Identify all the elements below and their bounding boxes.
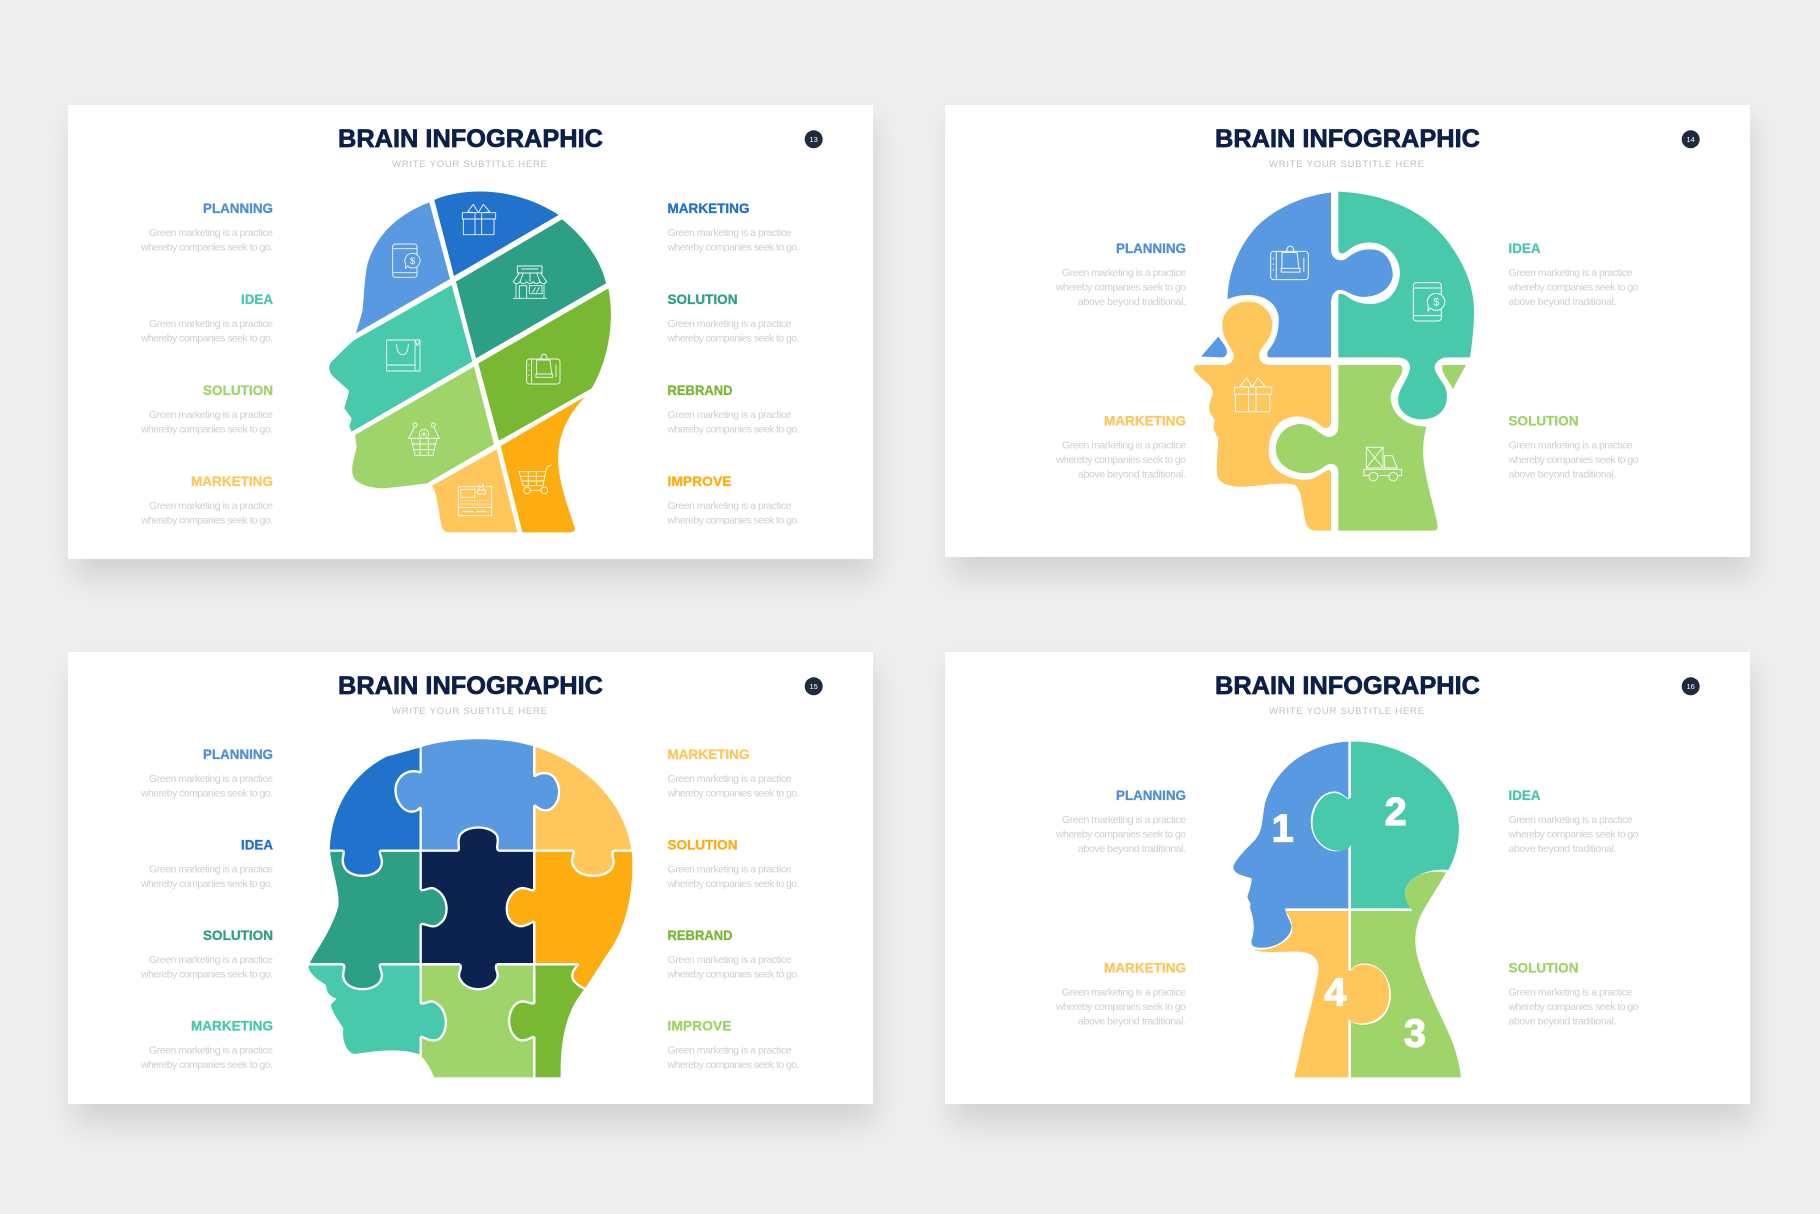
icon: gift <box>462 204 496 235</box>
left text: planning: whereby companies seek to go <box>1055 282 1186 294</box>
left text: marketing: whereby companies seek to go. <box>140 1059 273 1071</box>
right text: idea: whereby companies seek to go <box>1508 829 1639 841</box>
right text: marketing <box>666 200 800 254</box>
left text: marketing: MARKETING <box>191 473 273 489</box>
left text: marketing: whereby companies seek to go. <box>140 514 273 526</box>
left text: planning: Green marketing is a practice <box>1062 267 1186 279</box>
icon: tablet with dollar <box>1413 283 1445 321</box>
subtitle: WRITE YOUR SUBTITLE HERE <box>1269 159 1424 170</box>
segment: light blue crown <box>356 202 450 333</box>
head diagram: eight diagonal segments <box>329 192 611 532</box>
right text: idea: Green marketing is a practice <box>1508 267 1633 279</box>
left text: idea <box>140 836 273 890</box>
number 1: 1 <box>1272 806 1294 850</box>
left text: marketing: MARKETING <box>191 1018 273 1034</box>
left text: marketing: above beyond traditional. <box>1078 1016 1186 1028</box>
left text: planning <box>140 200 273 254</box>
right text: solution: whereby companies seek to go <box>1508 1001 1639 1013</box>
icon: tablet with dollar: $ <box>1433 297 1439 309</box>
cell row 1 <box>330 739 632 850</box>
left text: solution: SOLUTION <box>203 927 273 943</box>
right text: solution: Green marketing is a practice <box>1508 986 1633 998</box>
number 2: 2 <box>1385 790 1407 834</box>
left text: planning: Green marketing is a practice <box>1062 814 1186 826</box>
page badge <box>1682 677 1700 695</box>
head diagram: nine puzzle pieces <box>308 739 632 1078</box>
panel: slide 15 nine-piece puzzle head <box>68 652 873 1104</box>
right text: solution: SOLUTION <box>1508 412 1578 428</box>
icon: cart <box>519 465 552 494</box>
right text: improve: Green marketing is a practice <box>668 1044 792 1056</box>
piece 3: green <box>1351 872 1461 1077</box>
piece: light orange <box>1194 302 1331 531</box>
right text: improve: IMPROVE <box>668 1018 732 1034</box>
right text: marketing: MARKETING <box>668 200 750 216</box>
left text: idea <box>140 291 273 345</box>
right text: idea: above beyond traditional. <box>1508 296 1616 308</box>
right text: improve: whereby companies seek to go. <box>666 1059 800 1071</box>
right text: rebrand: Green marketing is a practice <box>668 954 792 966</box>
right text: idea <box>1508 240 1639 308</box>
panel: slide 14 four-piece puzzle head with icons <box>945 105 1750 557</box>
number 3: 3 <box>1404 1012 1426 1056</box>
right text: solution: Green marketing is a practice <box>1508 439 1633 451</box>
icon: tablet with dollar: $ <box>410 256 416 266</box>
right text: improve <box>666 1018 800 1071</box>
right text: solution: above beyond traditional. <box>1508 1016 1616 1028</box>
segment: light orange neck <box>432 449 517 532</box>
left text: idea: whereby companies seek to go. <box>140 878 273 890</box>
left text: planning <box>1055 240 1186 308</box>
head diagram: four numbered pieces <box>1233 742 1461 1077</box>
subtitle: WRITE YOUR SUBTITLE HERE <box>1269 706 1424 717</box>
left text: marketing: MARKETING <box>1104 412 1186 428</box>
right text: improve: whereby companies seek to go. <box>666 514 800 526</box>
right text: solution: SOLUTION <box>668 836 738 852</box>
left text: planning: PLANNING <box>1116 787 1186 803</box>
right text: solution <box>1508 960 1639 1028</box>
piece: teal <box>1338 192 1474 419</box>
left text: solution: whereby companies seek to go. <box>140 424 273 436</box>
right text: rebrand: REBRAND <box>668 382 732 398</box>
right text: improve: IMPROVE <box>668 473 732 489</box>
page badge: 15 <box>810 682 818 691</box>
page badge <box>1682 130 1700 148</box>
panel: slide 16 numbered puzzle head <box>945 652 1750 1104</box>
segment: orange neck <box>501 397 585 532</box>
left text: marketing: Green marketing is a practice <box>149 500 273 512</box>
icon: tablet with bag <box>1271 246 1308 280</box>
piece: green <box>1276 365 1466 531</box>
piece: blue <box>1201 193 1393 357</box>
right text: improve <box>666 473 800 526</box>
right text: solution: whereby companies seek to go. <box>666 878 800 890</box>
left text: planning: PLANNING <box>1116 240 1186 256</box>
icon: tablet with dollar <box>393 244 420 277</box>
left text: idea: Green marketing is a practice <box>149 318 273 330</box>
left text: planning: whereby companies seek to go. <box>140 242 273 254</box>
icon: tablet with bag <box>527 354 560 384</box>
icon: shop <box>513 266 547 298</box>
left text: marketing <box>1055 412 1186 481</box>
segment: dark teal <box>456 219 606 358</box>
left text: idea: Green marketing is a practice <box>149 864 273 876</box>
left text: planning: above beyond traditional. <box>1078 296 1186 308</box>
right text: marketing <box>666 746 800 800</box>
panel: slide 13 segmented head <box>68 105 873 559</box>
title: BRAIN INFOGRAPHIC <box>1215 125 1480 153</box>
left text: marketing <box>140 473 273 526</box>
page badge <box>805 677 823 695</box>
right text: solution <box>666 836 800 890</box>
subtitle: WRITE YOUR SUBTITLE HERE <box>392 706 547 717</box>
left text: planning: PLANNING <box>203 200 273 216</box>
right text: idea: IDEA <box>1508 787 1540 803</box>
head diagram: four puzzle pieces <box>1194 192 1474 531</box>
right text: rebrand <box>666 927 800 981</box>
left text: planning: Green marketing is a practice <box>149 773 273 785</box>
right text: solution: SOLUTION <box>668 291 738 307</box>
left text: idea: IDEA <box>241 836 273 852</box>
right text: rebrand: REBRAND <box>668 927 732 943</box>
right text: marketing: whereby companies seek to go. <box>666 788 800 800</box>
right text: solution: above beyond traditional. <box>1508 469 1616 481</box>
left text: solution: Green marketing is a practice <box>149 954 273 966</box>
left text: idea: whereby companies seek to go. <box>140 333 273 345</box>
right text: marketing: Green marketing is a practice <box>668 227 792 239</box>
left text: marketing <box>140 1018 273 1071</box>
right text: solution <box>666 291 800 345</box>
left text: marketing <box>1055 960 1186 1028</box>
piece 2: teal <box>1313 742 1459 908</box>
right text: idea <box>1508 787 1639 855</box>
cell row 2 <box>309 850 632 964</box>
icon: cash register <box>458 484 492 516</box>
page badge: 14 <box>1687 135 1695 144</box>
left text: marketing: above beyond traditional. <box>1078 469 1186 481</box>
left text: solution <box>140 382 273 436</box>
puzzle tabs <box>343 771 623 1040</box>
subtitle: WRITE YOUR SUBTITLE HERE <box>392 159 547 170</box>
number 4: 4 <box>1324 971 1346 1015</box>
right text: idea: whereby companies seek to go <box>1508 282 1639 294</box>
segment: green back <box>478 288 611 441</box>
left text: planning <box>140 746 273 800</box>
title: BRAIN INFOGRAPHIC <box>1215 672 1480 700</box>
right text: solution: whereby companies seek to go. <box>666 333 800 345</box>
left text: solution <box>140 927 273 981</box>
title: BRAIN INFOGRAPHIC <box>338 672 603 700</box>
right text: rebrand: Green marketing is a practice <box>668 409 792 421</box>
left text: planning: whereby companies seek to go. <box>140 788 273 800</box>
left text: planning: PLANNING <box>203 746 273 762</box>
left text: planning <box>1055 787 1186 855</box>
right text: rebrand: whereby companies seek to go. <box>666 969 800 981</box>
right text: idea: IDEA <box>1508 240 1540 256</box>
left text: planning: Green marketing is a practice <box>149 227 273 239</box>
right text: marketing: whereby companies seek to go. <box>666 242 800 254</box>
left text: solution: Green marketing is a practice <box>149 409 273 421</box>
piece 1: blue <box>1233 742 1348 948</box>
left text: marketing: MARKETING <box>1104 960 1186 976</box>
right text: rebrand <box>666 382 800 436</box>
segment: teal face <box>329 285 472 432</box>
right text: idea: Green marketing is a practice <box>1508 814 1633 826</box>
right text: idea: above beyond traditional. <box>1508 843 1616 855</box>
right text: marketing: Green marketing is a practice <box>668 773 792 785</box>
right text: solution: SOLUTION <box>1508 960 1578 976</box>
icon: basket <box>408 423 440 455</box>
cell row 3 <box>308 963 602 1078</box>
left text: marketing: Green marketing is a practice <box>149 1044 273 1056</box>
page badge: 13 <box>810 135 818 144</box>
page badge: 16 <box>1687 682 1695 691</box>
icon: gift <box>1234 378 1272 412</box>
right text: solution: Green marketing is a practice <box>668 864 792 876</box>
right text: solution: Green marketing is a practice <box>668 318 792 330</box>
left text: marketing: whereby companies seek to go <box>1055 1001 1186 1013</box>
title: BRAIN INFOGRAPHIC <box>338 125 603 153</box>
left text: solution: whereby companies seek to go. <box>140 969 273 981</box>
left text: idea: IDEA <box>241 291 273 307</box>
left text: planning: above beyond traditional. <box>1078 843 1186 855</box>
left text: marketing: Green marketing is a practice <box>1062 439 1186 451</box>
segment: light green jaw <box>352 367 494 488</box>
left text: marketing: Green marketing is a practice <box>1062 986 1186 998</box>
left text: planning: whereby companies seek to go <box>1055 829 1186 841</box>
right text: solution: whereby companies seek to go <box>1508 454 1639 466</box>
page badge <box>805 130 823 148</box>
icon: truck <box>1364 447 1402 481</box>
left text: solution: SOLUTION <box>203 382 273 398</box>
segment: dark blue crown <box>434 192 559 276</box>
right text: rebrand: whereby companies seek to go. <box>666 424 800 436</box>
icon: shopping bag <box>387 340 420 371</box>
right text: solution <box>1508 412 1639 481</box>
left text: marketing: whereby companies seek to go <box>1055 454 1186 466</box>
right text: marketing: MARKETING <box>668 746 750 762</box>
piece 4: light orange <box>1254 911 1389 1077</box>
right text: improve: Green marketing is a practice <box>668 500 792 512</box>
